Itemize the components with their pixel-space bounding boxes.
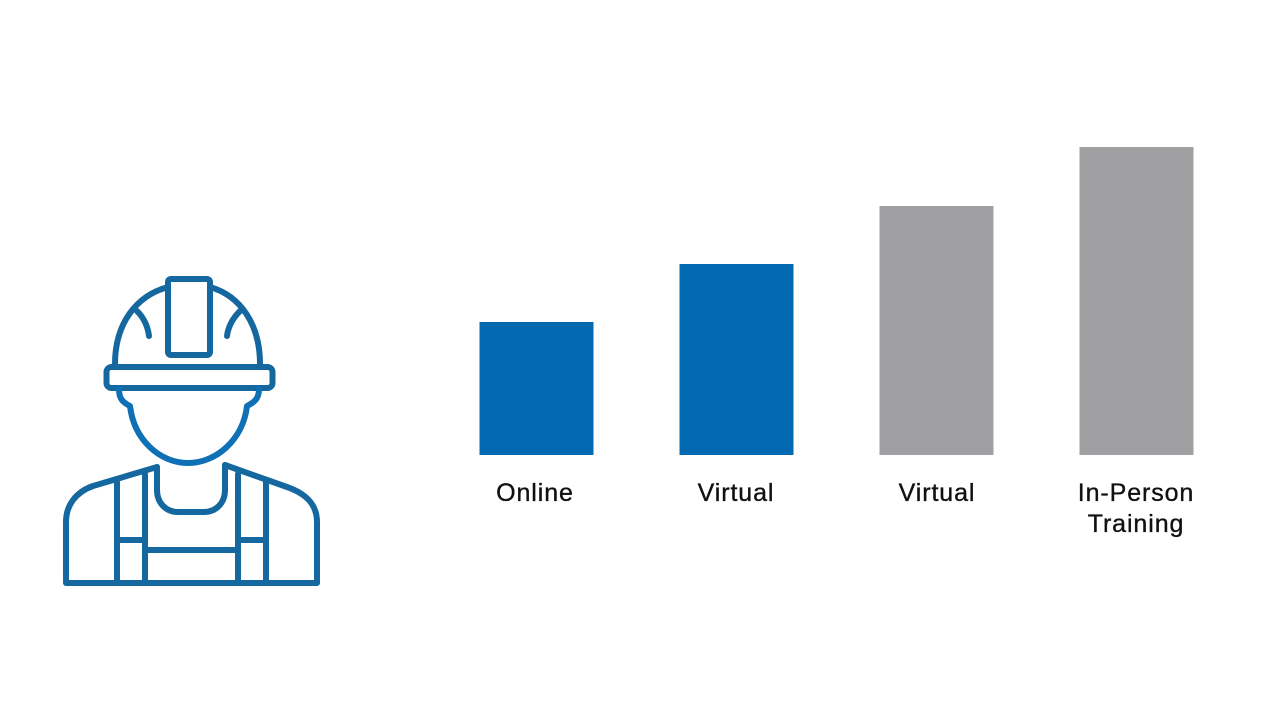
bar: virtual grey	[880, 206, 994, 455]
bar: virtual blue	[680, 264, 794, 455]
bar chart	[480, 147, 1194, 538]
label: online: Online	[496, 479, 574, 507]
label: virtual: Virtual	[698, 479, 774, 507]
face outline	[119, 389, 259, 463]
helmet brim	[106, 367, 272, 388]
bar: in-person	[1080, 147, 1194, 455]
helmet right rib	[227, 311, 240, 336]
helmet left rib	[137, 311, 149, 336]
label: virtual second: Virtual	[899, 479, 975, 507]
label: in-person training: Training	[1088, 510, 1184, 538]
neckline	[157, 465, 225, 512]
label: in-person training: In-Person	[1078, 479, 1194, 507]
helmet centre plate	[168, 279, 210, 355]
overall cross bars	[117, 540, 266, 550]
helmet dome	[115, 287, 260, 364]
icon: construction worker	[66, 279, 317, 583]
overall straps	[117, 474, 266, 583]
bar: online	[480, 322, 594, 455]
torso and shoulders	[66, 465, 317, 583]
